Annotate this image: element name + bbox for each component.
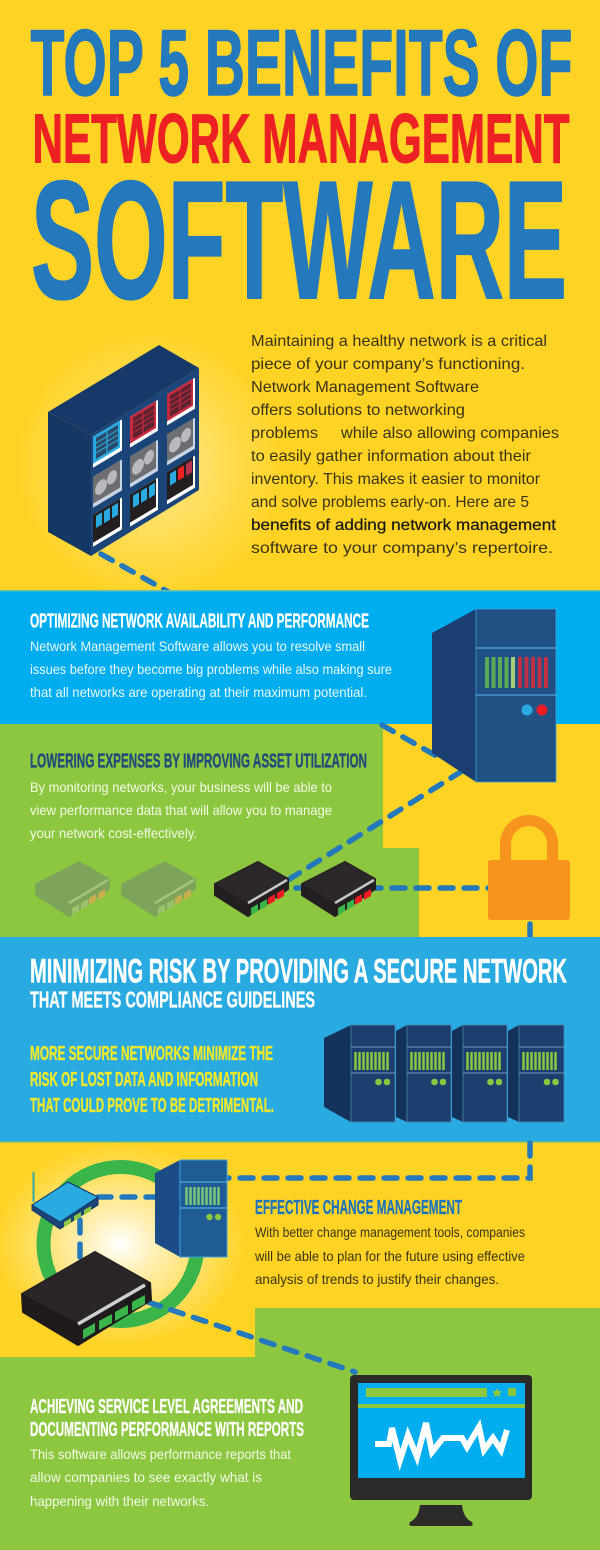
icon: large black router: [22, 1252, 151, 1345]
intro text: inventory. This makes it easier to monitor: [251, 471, 541, 488]
intro text: to easily gather information about their: [251, 448, 532, 465]
intro text: [251, 333, 559, 557]
dashed connector: access point to black router: [77, 1220, 83, 1262]
body: optimizing: [30, 638, 392, 700]
heading: service level agreements: DOCUMENTING PERFORMANCE WITH REPORTS: [30, 1419, 304, 1441]
body: service level agreements: happening with their networks.: [30, 1493, 209, 1509]
body: lowering expenses: [30, 779, 332, 841]
body: change management: [254, 1224, 525, 1287]
intro text: problems: [251, 425, 318, 442]
panel: service level agreements: [0, 1308, 600, 1550]
callout: secure networks: THAT COULD PROVE TO BE DETRIMENTAL.: [30, 1095, 274, 1117]
body: service level agreements: [30, 1446, 291, 1509]
body: optimizing: that all networks are operating at their maximum potential.: [30, 684, 367, 700]
dashed connector: section one to server: [382, 725, 440, 758]
panel: lowering expenses: [0, 724, 419, 937]
icon: faded router two: [122, 862, 195, 916]
body: service level agreements: allow companies to see exactly what is: [30, 1469, 262, 1485]
body: lowering expenses: view performance data that will allow you to manage: [30, 802, 332, 818]
body: optimizing: issues before they become big problems while also making sure: [30, 661, 392, 677]
intro text: piece of your company’s functioning.: [251, 356, 525, 373]
intro text: while also allowing companies: [340, 425, 559, 442]
dashed connector: access point to server: [98, 1194, 158, 1200]
heading: effective change management: EFFECTIVE CHANGE MANAGEMENT: [255, 1197, 462, 1219]
body: lowering expenses: By monitoring networks, your business will be able to: [30, 779, 332, 795]
intro text: software to your company’s repertoire.: [251, 540, 553, 557]
dashed connector: rack row to change management server: [228, 1143, 530, 1178]
panel: optimizing network availability: [0, 590, 600, 724]
icon: server rack row: [324, 1025, 564, 1122]
icon: tower server small: [155, 1160, 227, 1257]
heading: lowering expenses: LOWERING EXPENSES BY IMPROVING ASSET UTILIZATION: [30, 750, 367, 772]
dashed connector: server bank to first section: [101, 554, 172, 594]
heading: service level agreements: ACHIEVING SERVICE LEVEL AGREEMENTS AND: [30, 1396, 303, 1418]
icon: tower server: [432, 609, 556, 782]
panel: minimizing risk: [0, 937, 600, 1141]
icon: padlock: [488, 820, 570, 920]
intro text: Maintaining a healthy network is a critical: [251, 333, 547, 350]
callout: secure networks: MORE SECURE NETWORKS MINIMIZE THE: [30, 1043, 273, 1065]
dashed connector: black router to monitor: [148, 1302, 355, 1372]
title: [30, 10, 572, 334]
intro text: and solve problems early-on. Here are 5: [251, 494, 529, 511]
icon: wireless access point: [32, 1172, 98, 1229]
body: service level agreements: This software allows performance reports that: [30, 1446, 291, 1462]
body: change management: analysis of trends to justify their changes.: [255, 1271, 499, 1287]
icon: faded router one: [36, 862, 109, 916]
callout: secure networks: RISK OF LOST DATA AND INFORMATION: [30, 1069, 258, 1091]
dashed connector: router to lock: [296, 885, 490, 891]
body: optimizing: Network Management Software allows you to resolve small: [30, 638, 365, 654]
callout: secure networks: [30, 1043, 274, 1117]
icon: server bank: [48, 345, 199, 556]
heading: service level agreements: [30, 1396, 304, 1441]
heading: optimizing: OPTIMIZING NETWORK AVAILABILITY AND PERFORMANCE: [30, 610, 369, 632]
body: lowering expenses: your network cost-effectively.: [30, 825, 197, 841]
icon: dark router one: [215, 862, 288, 916]
intro text: Network Management Software: [251, 379, 479, 396]
icon: green ring: [44, 1167, 198, 1321]
icon: monitor with waveform: [350, 1375, 532, 1526]
intro text: offers solutions to networking: [251, 402, 465, 419]
body: change management: will be able to plan for the future using effective: [254, 1248, 525, 1264]
glow behind server bank: [15, 330, 285, 600]
icon: dark router two: [302, 862, 375, 916]
intro text: benefits of adding network management: [251, 517, 557, 534]
body: change management: With better change management tools, companies: [255, 1224, 525, 1240]
dashed connector: server to router: [288, 771, 462, 880]
panel: effective change management: [0, 1141, 600, 1357]
dashed connector: lock to secure network section: [527, 924, 533, 938]
subheading: compliance: THAT MEETS COMPLIANCE GUIDELINES: [30, 986, 315, 1012]
